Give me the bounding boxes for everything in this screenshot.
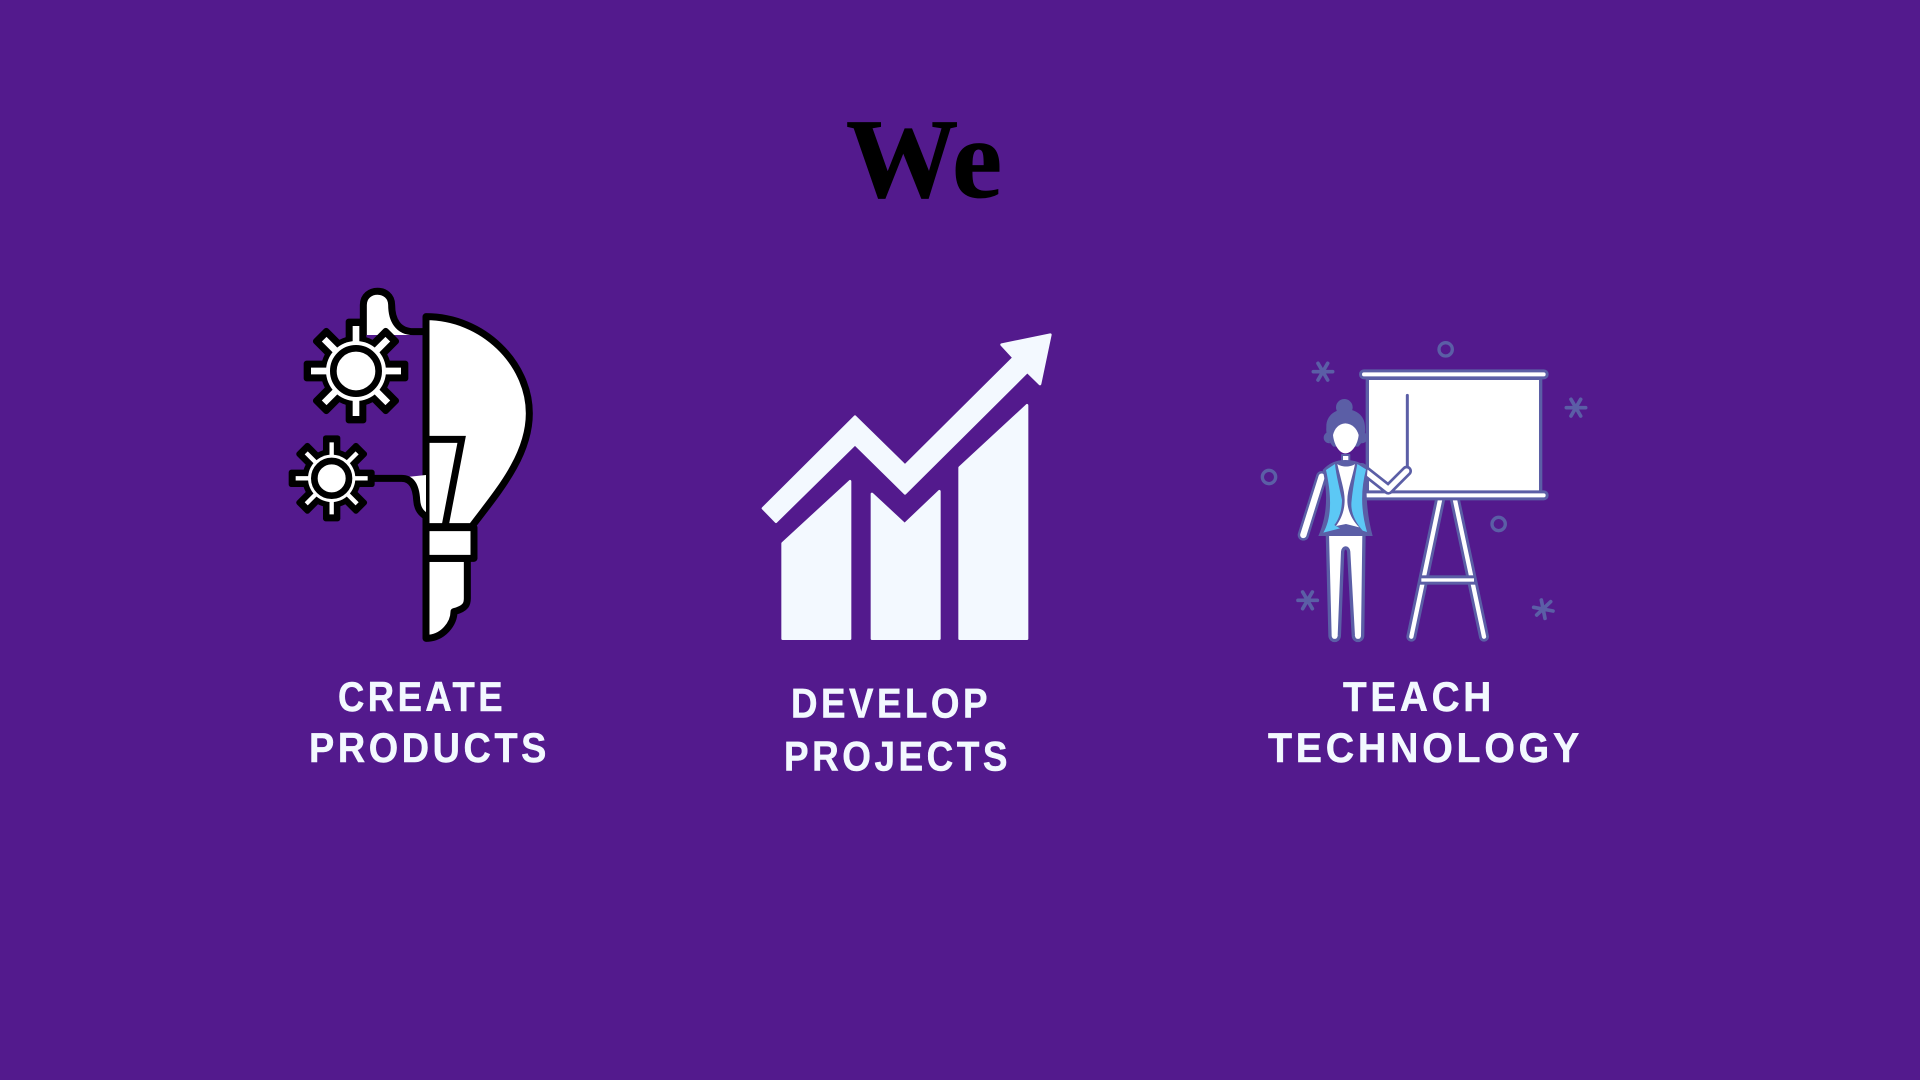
- jacket: [1318, 460, 1373, 536]
- pointer: [1403, 395, 1412, 468]
- bulb base: [426, 558, 467, 638]
- gear small: [289, 435, 375, 521]
- jacket panel right: [1351, 464, 1367, 532]
- label: develop projects: PROJECTS: [784, 732, 1011, 780]
- label: create products: PRODUCTS: [309, 724, 550, 771]
- bulb inner fold: [426, 439, 462, 527]
- trend arrow: [763, 335, 1050, 522]
- teacher figure: [1303, 399, 1407, 640]
- board top rail: [1364, 359, 1544, 389]
- gear large: [304, 319, 408, 423]
- icon: growth bar chart with arrow: [763, 335, 1050, 639]
- pointing arm: [1362, 468, 1407, 489]
- bar middle: [872, 491, 939, 639]
- neck: [1342, 455, 1349, 464]
- icon: teacher at presentation board: [1262, 343, 1586, 640]
- bar left: [783, 481, 850, 639]
- label: develop projects: DEVELOP: [791, 680, 991, 726]
- decorative asterisks: [1298, 363, 1586, 618]
- face: [1333, 423, 1359, 453]
- label: create products: [309, 673, 550, 771]
- easel legs: [1411, 500, 1484, 637]
- lower wire outline: [370, 478, 426, 517]
- label: develop projects: [784, 680, 1011, 780]
- label: teach technology: TECHNOLOGY: [1268, 724, 1583, 771]
- label: teach technology: TEACH: [1343, 673, 1495, 720]
- far arm: [1303, 477, 1322, 535]
- hair bun: [1336, 399, 1353, 416]
- ears: [1324, 433, 1367, 443]
- decorative rings: [1262, 343, 1505, 531]
- title: We: [846, 97, 1002, 222]
- bulb glass: [426, 317, 529, 527]
- legs: [1327, 533, 1364, 640]
- hair: [1326, 409, 1365, 447]
- label: teach technology: [1268, 673, 1583, 771]
- board: [1367, 378, 1541, 493]
- label: create products: CREATE: [338, 673, 506, 720]
- bar right: [960, 405, 1027, 639]
- easel crossbar: [1419, 575, 1476, 585]
- lower wire: [403, 475, 426, 517]
- bulb collar: [426, 528, 474, 558]
- shirt: [1336, 464, 1359, 527]
- icon: half light bulb with gears: [289, 291, 529, 638]
- board bottom rail: [1364, 480, 1544, 510]
- top wire: [363, 291, 426, 335]
- jacket panel left: [1323, 464, 1342, 533]
- top wire outline: [363, 291, 426, 335]
